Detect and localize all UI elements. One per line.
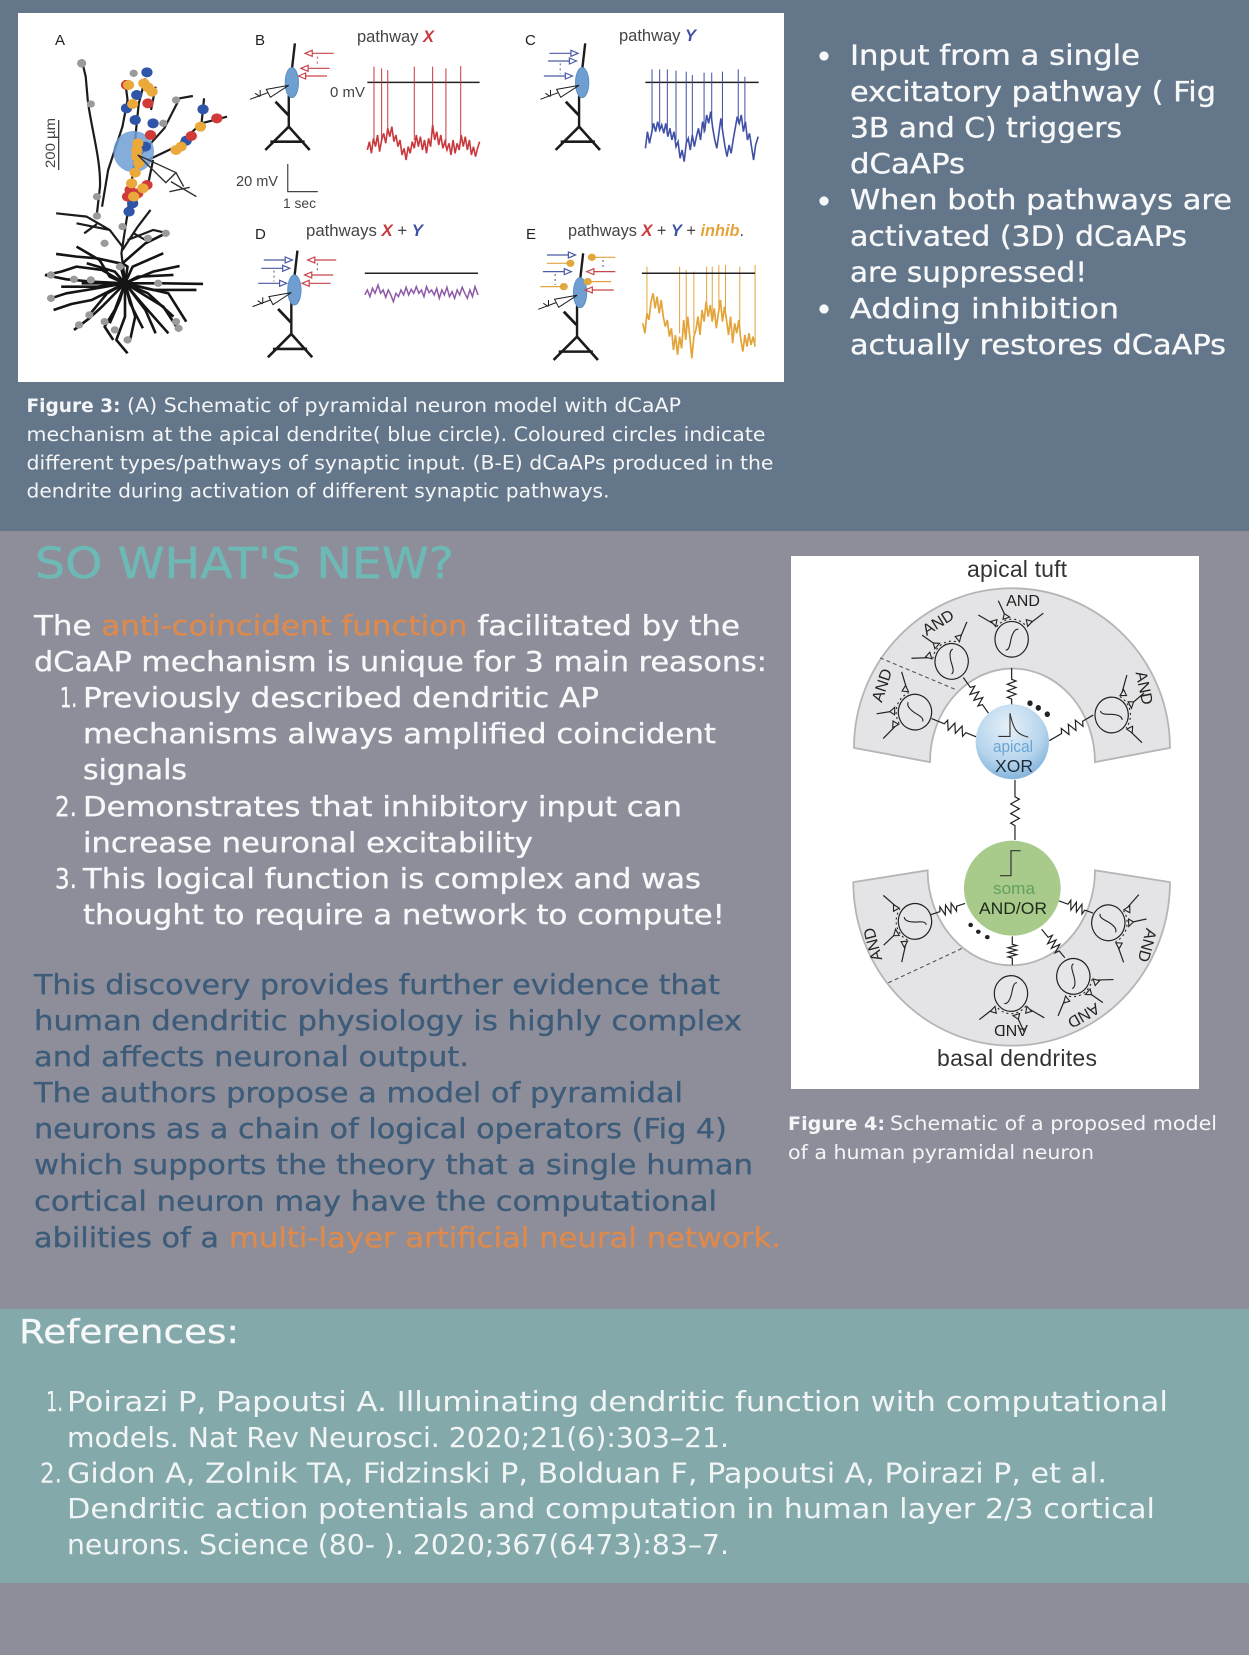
heading: so what's new: SO WHAT'S NEW? [35,539,454,589]
text block: discovery and multi-layer network: which supports the theory that a single human [34,1148,753,1181]
figure 3 panel labels: pathways X + Y [306,222,425,240]
figure 4 labels: apical tuft [967,556,1068,582]
text block: discovery and multi-layer network: human dendritic physiology is highly complex [34,1004,742,1037]
text block: anti-coincident function reasons: This logical function is complex and was [82,862,701,895]
text block: anti-coincident function reasons: 2. [55,790,77,823]
figure 4 labels: AND [869,667,896,704]
reference list: Poirazi P, Papoutsi A. Illuminating dendritic function with computational [67,1385,1168,1418]
reference list: 2. [40,1457,62,1490]
text block: discovery and multi-layer network: multi-layer artificial neural network. [229,1221,781,1254]
text block: discovery and multi-layer network: abilities of a [34,1221,219,1254]
figure 3 panel labels: 200 µm [42,118,58,168]
bullet list: key findings: dCaAPs [850,147,965,180]
figure 3 panel labels: B [255,32,265,49]
bullet list: key findings: 3B and C) triggers [850,111,1122,144]
text block: anti-coincident function reasons: The anti-coincident function facilitated by the [33,609,740,642]
reference list: models. Nat Rev Neurosci. 2020;21(6):303–21. [67,1421,729,1454]
figure 4 labels: apical [993,738,1033,756]
figure 3 caption: Figure 3: [26,395,120,417]
bullet list: key findings: Input from a single [850,38,1140,72]
figure 3 A: neuron with synapses [45,59,227,353]
text block: anti-coincident function reasons: 3. [55,862,77,895]
text block: discovery and multi-layer network: This discovery provides further evidence that [33,968,720,1001]
figure 3 panel labels: C [525,32,536,49]
figure 3 panel labels: pathways X + Y + inhib. [568,222,744,240]
reference list: neurons. Science (80- ). 2020;367(6473):83–7. [67,1528,729,1561]
figure 3 panel labels: pathway X [357,28,435,46]
bullet list: key findings: excitatory pathway ( Fig [850,75,1216,108]
text block: anti-coincident function reasons: mechanisms always amplified coincident [83,717,716,750]
panel: references [0,1309,1249,1583]
text block: anti-coincident function reasons: 1. [60,681,77,714]
panel: figure 3 band [0,0,1249,531]
figure 3 B: pathway X schematic and trace [250,43,480,192]
figure 4 labels: AND/OR [979,899,1047,918]
figure 4 image panel [791,556,1199,1089]
text block: discovery and multi-layer network: cortical neuron may have the computational [34,1184,717,1218]
text block: discovery and multi-layer network: The authors propose a model of pyramidal [33,1076,683,1109]
bullet list: key findings: Adding inhibition [850,292,1119,325]
figure 3 panel labels [42,27,744,243]
text block: anti-coincident function reasons: thought to require a network to compute! [83,898,725,931]
bullet list: key findings: activated (3D) dCaAPs [850,220,1187,252]
figure 4 caption: Schematic of a proposed model [890,1112,1217,1135]
text block: anti-coincident function reasons [33,609,767,931]
figure 4 labels: AND [1132,670,1155,706]
reference list [40,1385,1168,1561]
references heading: References: [19,1312,239,1351]
figure 3 C: pathway Y schematic and trace [540,43,759,162]
figure 4 labels: AND [1006,593,1040,610]
figure 3 caption: (A) Schematic of pyramidal neuron model with dCaAP [127,394,681,417]
bullet list: key findings [820,38,1232,361]
figure 4 caption: Figure 4: [788,1113,885,1135]
text block: discovery and multi-layer network: and affects neuronal output. [34,1040,469,1073]
figure 3 caption [26,394,774,502]
figure 3 caption: different types/pathways of synaptic input. (B-E) dCaAPs produced in the [26,452,774,474]
figure 4 labels: soma [993,880,1036,898]
figure 3 panel labels: 1 sec [283,195,316,211]
figure 3 panel labels: E [526,226,536,243]
figure 3 caption: mechanism at the apical dendrite( blue circle). Coloured circles indicate [26,423,766,446]
figure 4 labels: AND [1134,927,1159,964]
figure 4 labels: basal dendrites [937,1045,1097,1071]
figure 4 caption: of a human pyramidal neuron [788,1141,1094,1164]
figure 4 labels: AND [1064,999,1102,1031]
figure 3 D: pathways X + Y schematic and trace [253,251,478,357]
text block: discovery and multi-layer network [33,968,781,1254]
figure 3 caption: dendrite during activation of different synaptic pathways. [26,480,610,502]
apical XOR node [976,704,1049,779]
text block: anti-coincident function reasons: increase neuronal excitability [83,826,533,859]
panel: so what's new [33,539,1217,1254]
figure 3 panel labels: 0 mV [330,84,365,101]
figure 4 labels: AND [920,607,957,639]
figure 3 panel labels: D [255,226,266,243]
figure 3 E: pathways X + Y + inhib schematic and trace [538,252,755,360]
soma AND/OR node [964,841,1061,936]
text block: anti-coincident function reasons: dCaAP mechanism is unique for 3 main reasons: [34,645,767,678]
figure 3 image panel [18,13,784,382]
figure 4 caption [788,1112,1217,1164]
reference list: Dendritic action potentials and computation in human layer 2/3 cortical [67,1492,1155,1525]
reference list: Gidon A, Zolnik TA, Fidzinski P, Bolduan F, Papoutsi A, Poirazi P, et al. [67,1457,1107,1490]
figure 4 network diagram [853,588,1170,1046]
bullet list: key findings: are suppressed! [850,256,1087,288]
text block: discovery and multi-layer network: neurons as a chain of logical operators (Fig 4) [34,1112,727,1145]
figure 3 panel labels: A [55,32,65,49]
bullet list: key findings: When both pathways are [850,183,1232,216]
reference list: 1. [46,1385,63,1418]
text block: anti-coincident function reasons: Demonstrates that inhibitory input can [83,790,682,823]
figure 4 labels: XOR [995,756,1033,776]
text block: anti-coincident function reasons: signals [83,753,187,786]
figure 4 labels: AND [861,926,886,963]
text block: anti-coincident function reasons: Previously described dendritic AP [83,681,599,714]
figure 3 panel labels: 20 mV [236,173,278,190]
figure 3 panel labels: pathway Y [619,27,698,45]
figure 4 labels [861,556,1159,1071]
figure 4 labels: AND [994,1021,1028,1038]
bullet list: key findings: actually restores dCaAPs [850,328,1226,361]
